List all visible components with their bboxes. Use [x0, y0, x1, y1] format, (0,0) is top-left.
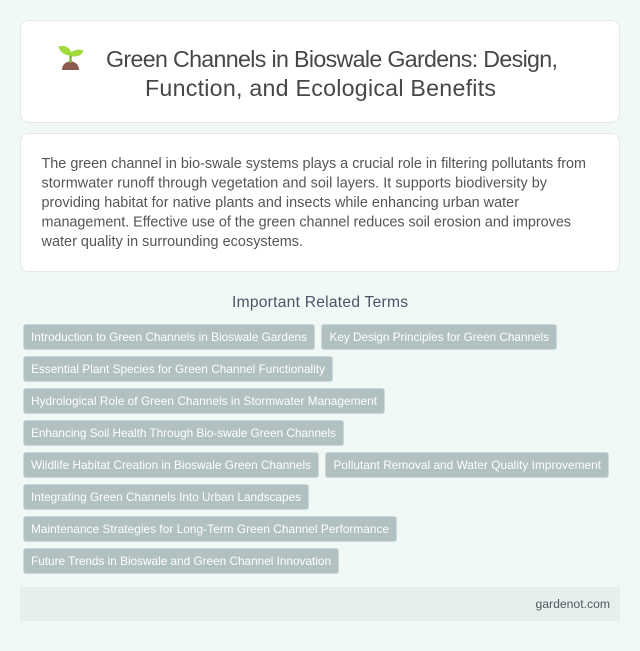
description text: The green channel in bio-swale systems plays a crucial role in filtering pollutants from: [42, 156, 586, 172]
header panel: [20, 20, 620, 122]
tag: Introduction to Green Channels in Bioswale Gardens: [31, 330, 307, 344]
tag: Wildlife Habitat Creation in Bioswale Green Channels: [31, 458, 311, 472]
tag: Hydrological Role of Green Channels in Stormwater Management: [31, 394, 378, 408]
tag: Essential Plant Species for Green Channel Functionality: [31, 362, 325, 376]
panel: description: [20, 134, 620, 272]
footer: [20, 587, 620, 621]
title: [106, 46, 558, 101]
tag: [24, 356, 332, 382]
description text: [40, 156, 586, 250]
tag: [24, 548, 338, 574]
tag: [24, 516, 396, 542]
description text: water quality in surrounding ecosystems.: [40, 234, 303, 250]
title: Function, and Ecological Benefits: [145, 75, 496, 101]
icon: sprout: [58, 46, 84, 70]
description text: stormwater runoff through vegetation and soil layers. It supports biodiversity by: [42, 176, 548, 192]
title: Green Channels in Bioswale Gardens: Design,: [106, 46, 558, 72]
heading: important related terms: Important Related Terms: [232, 294, 408, 311]
related terms tags: [24, 324, 608, 574]
tag: Maintenance Strategies for Long-Term Green Channel Performance: [31, 522, 389, 536]
tag: [24, 420, 344, 446]
tag: [322, 324, 556, 350]
tag: [24, 324, 314, 350]
tag: Integrating Green Channels Into Urban Landscapes: [31, 490, 301, 504]
tag: [24, 452, 318, 478]
description text: providing habitat for native plants and insects while enhancing urban water: [42, 195, 519, 211]
tag: Enhancing Soil Health Through Bio-swale Green Channels: [31, 426, 336, 440]
tag: Pollutant Removal and Water Quality Improvement: [334, 458, 602, 472]
description text: management. Effective use of the green channel reduces soil erosion and improves: [42, 214, 571, 230]
tag: [24, 484, 308, 510]
tag: Key Design Principles for Green Channels: [330, 330, 549, 344]
footer text: site name: gardenot.com: [536, 597, 610, 611]
tag: [24, 388, 384, 414]
tag: Future Trends in Bioswale and Green Channel Innovation: [31, 554, 331, 568]
tag: [326, 452, 608, 478]
